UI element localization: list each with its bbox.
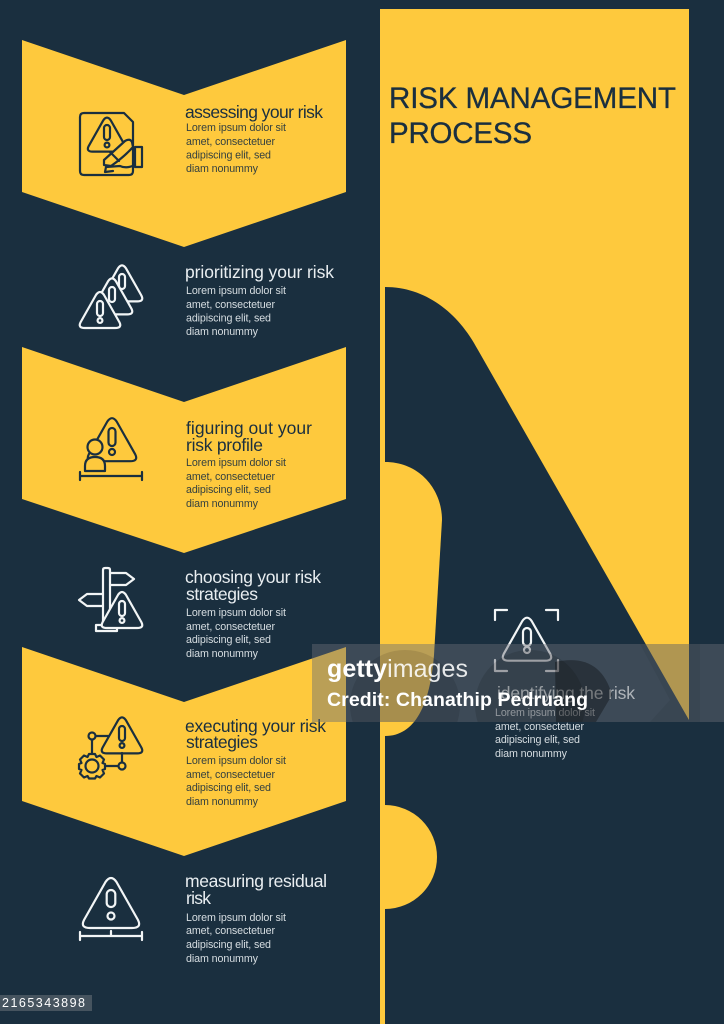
text: assessing your risk: diam nonummy [186, 163, 259, 175]
text: prioritizing your risk [185, 262, 334, 338]
title: RISK MANAGEMENT [389, 82, 676, 115]
text: choosing your risk strategies: strategies [186, 584, 258, 604]
text: assessing your risk [185, 102, 323, 175]
text: executing your risk strategies: Lorem ipsum dolor sit [186, 755, 286, 767]
panel: right yellow shape with diagonal [380, 9, 689, 1024]
panel: chevron 2 [22, 347, 346, 553]
text: choosing your risk strategies: diam nonummy [186, 648, 259, 660]
text: executing your risk strategies [185, 716, 326, 808]
text: measuring residual risk: diam nonummy [186, 953, 259, 965]
text: executing your risk strategies: adipiscing elit, sed [186, 782, 271, 794]
watermark logo: gettyimages [327, 655, 468, 683]
watermark band [312, 644, 724, 722]
icon: risk profile person and warning [80, 418, 142, 480]
text: executing your risk strategies: executing your risk [185, 716, 326, 736]
title [389, 82, 676, 150]
text: prioritizing your risk: Lorem ipsum dolor sit [186, 285, 286, 297]
text: measuring residual risk: risk [186, 888, 211, 908]
text: executing your risk strategies: amet, consectetuer [186, 769, 275, 781]
icon: executing gear network and warning [79, 717, 142, 778]
watermark credit: Credit: Chanathip Pedruang [327, 689, 588, 711]
text: figuring out your risk profile: Lorem ipsum dolor sit [186, 457, 286, 469]
text: executing your risk strategies: diam nonummy [186, 796, 259, 808]
text: measuring residual risk: Lorem ipsum dolor sit [186, 912, 286, 924]
icon: identifying risk scan frame [495, 610, 558, 671]
icon: prioritizing stacked warnings [80, 265, 142, 328]
text: measuring residual risk: adipiscing elit, sed [186, 939, 271, 951]
text: identifying the risk: Lorem ipsum dolor sit [495, 707, 595, 719]
text: measuring residual risk [185, 871, 327, 965]
panel: chevron 3 [22, 647, 346, 856]
text: prioritizing your risk: adipiscing elit, sed [186, 312, 271, 324]
panel: chevron 1 [22, 40, 346, 247]
text: identifying the risk [495, 683, 635, 760]
text: identifying the risk: identifying the risk [497, 683, 635, 703]
text: figuring out your risk profile [186, 418, 312, 510]
text: identifying the risk: amet, consectetuer [495, 721, 584, 733]
text: measuring residual risk: measuring residual [185, 871, 327, 891]
title: PROCESS [389, 117, 532, 150]
text: assessing your risk: adipiscing elit, sed [186, 150, 271, 162]
panel: semicircle tab [385, 805, 437, 909]
text: figuring out your risk profile: diam nonummy [186, 498, 259, 510]
image id tag: 2165343898 [2, 996, 85, 1010]
text: choosing your risk strategies: Lorem ipsum dolor sit [186, 607, 286, 619]
text: figuring out your risk profile: amet, consectetuer [186, 471, 275, 483]
text: figuring out your risk profile: figuring out your [186, 418, 312, 438]
text: prioritizing your risk: diam nonummy [186, 326, 259, 338]
text: prioritizing your risk: amet, consectetuer [186, 299, 275, 311]
text: choosing your risk strategies: adipiscing elit, sed [186, 634, 271, 646]
text: assessing your risk: assessing your risk [185, 102, 323, 122]
text: executing your risk strategies: strategies [186, 732, 258, 752]
text: identifying the risk: diam nonummy [495, 748, 568, 760]
text: choosing your risk strategies [185, 567, 321, 660]
text: figuring out your risk profile: adipiscing elit, sed [186, 484, 271, 496]
text: identifying the risk: adipiscing elit, sed [495, 734, 580, 746]
text: assessing your risk: Lorem ipsum dolor sit [186, 122, 286, 134]
panel: lower yellow tab [385, 462, 442, 736]
text: choosing your risk strategies: amet, consectetuer [186, 621, 275, 633]
icon: assessing risk document [80, 113, 142, 175]
text: assessing your risk: amet, consectetuer [186, 136, 275, 148]
text: measuring residual risk: amet, consectetuer [186, 925, 275, 937]
text: figuring out your risk profile: risk profile [186, 435, 263, 455]
icon: signpost with warning [79, 568, 142, 631]
text: prioritizing your risk: prioritizing your risk [185, 262, 334, 282]
icon: measuring residual risk [80, 878, 142, 940]
text: choosing your risk strategies: choosing your risk [185, 567, 321, 587]
